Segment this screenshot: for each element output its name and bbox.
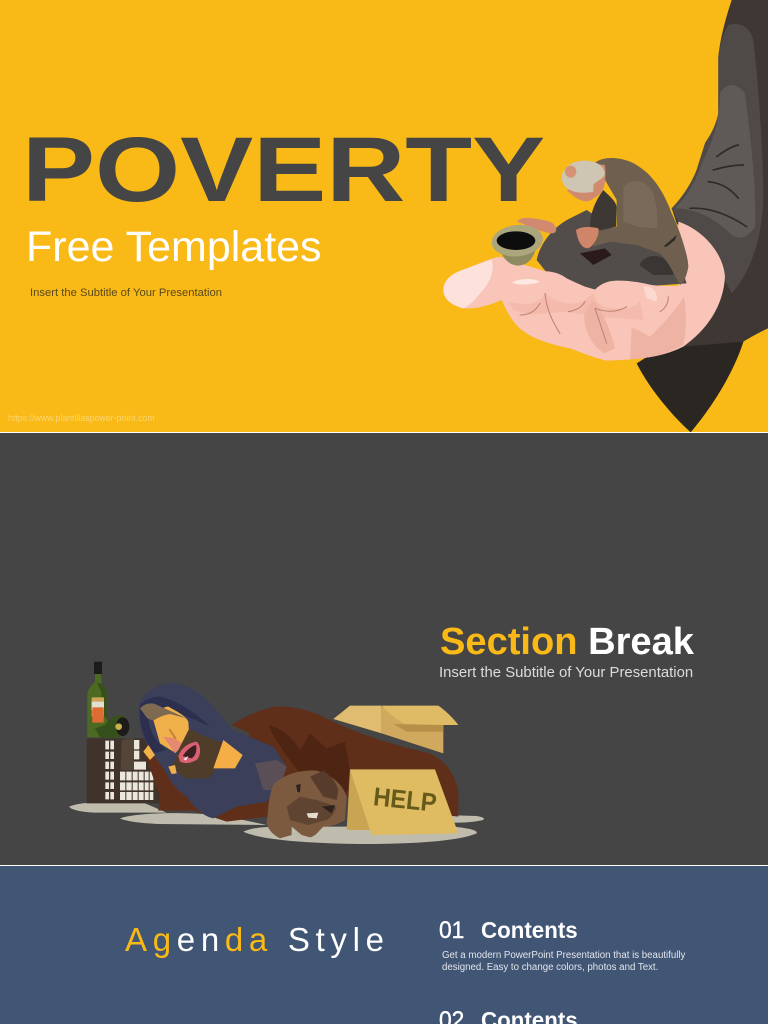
item 01 number: 01 xyxy=(439,917,464,944)
section heading: Section Break xyxy=(440,621,694,663)
blanket xyxy=(143,707,458,822)
agenda heading: Agenda Style xyxy=(125,921,390,958)
item 01 heading: Contents xyxy=(481,917,578,943)
bottle xyxy=(94,662,102,674)
subtitle heading: Free Templates xyxy=(26,223,322,271)
man body xyxy=(138,683,287,818)
face and beard xyxy=(153,707,189,752)
panel: title slide xyxy=(0,0,768,432)
help label: HELP xyxy=(372,781,438,818)
agenda item 02 xyxy=(439,1007,578,1024)
cuff xyxy=(637,337,745,432)
item 01 text xyxy=(442,950,686,973)
illustration: homeless man sleeping with dog xyxy=(69,662,484,844)
cup xyxy=(500,247,537,266)
illustration: beggar on a giant hand xyxy=(443,0,768,432)
fingers xyxy=(503,271,685,337)
panel: section break slide xyxy=(0,433,768,865)
panel: agenda slide xyxy=(0,866,768,1024)
title: POVERTY xyxy=(22,119,545,221)
subtitle text: Insert the Subtitle of Your Presentation xyxy=(30,287,222,299)
help sign xyxy=(347,769,372,830)
sleeve xyxy=(672,0,768,347)
crate xyxy=(87,738,167,803)
box xyxy=(382,707,443,753)
tiny man xyxy=(490,158,688,290)
section subtitle: Insert the Subtitle of Your Presentation xyxy=(439,665,693,681)
hand xyxy=(443,222,725,361)
item 01 text: designed. Easy to change colors, photos and Text. xyxy=(442,962,658,973)
dog xyxy=(267,770,347,838)
agenda item 01 xyxy=(439,917,686,973)
website url: https://www.plantillaspower-point.com xyxy=(8,413,155,423)
item 01 text: Get a modern PowerPoint Presentation that is beautifully xyxy=(442,950,685,961)
